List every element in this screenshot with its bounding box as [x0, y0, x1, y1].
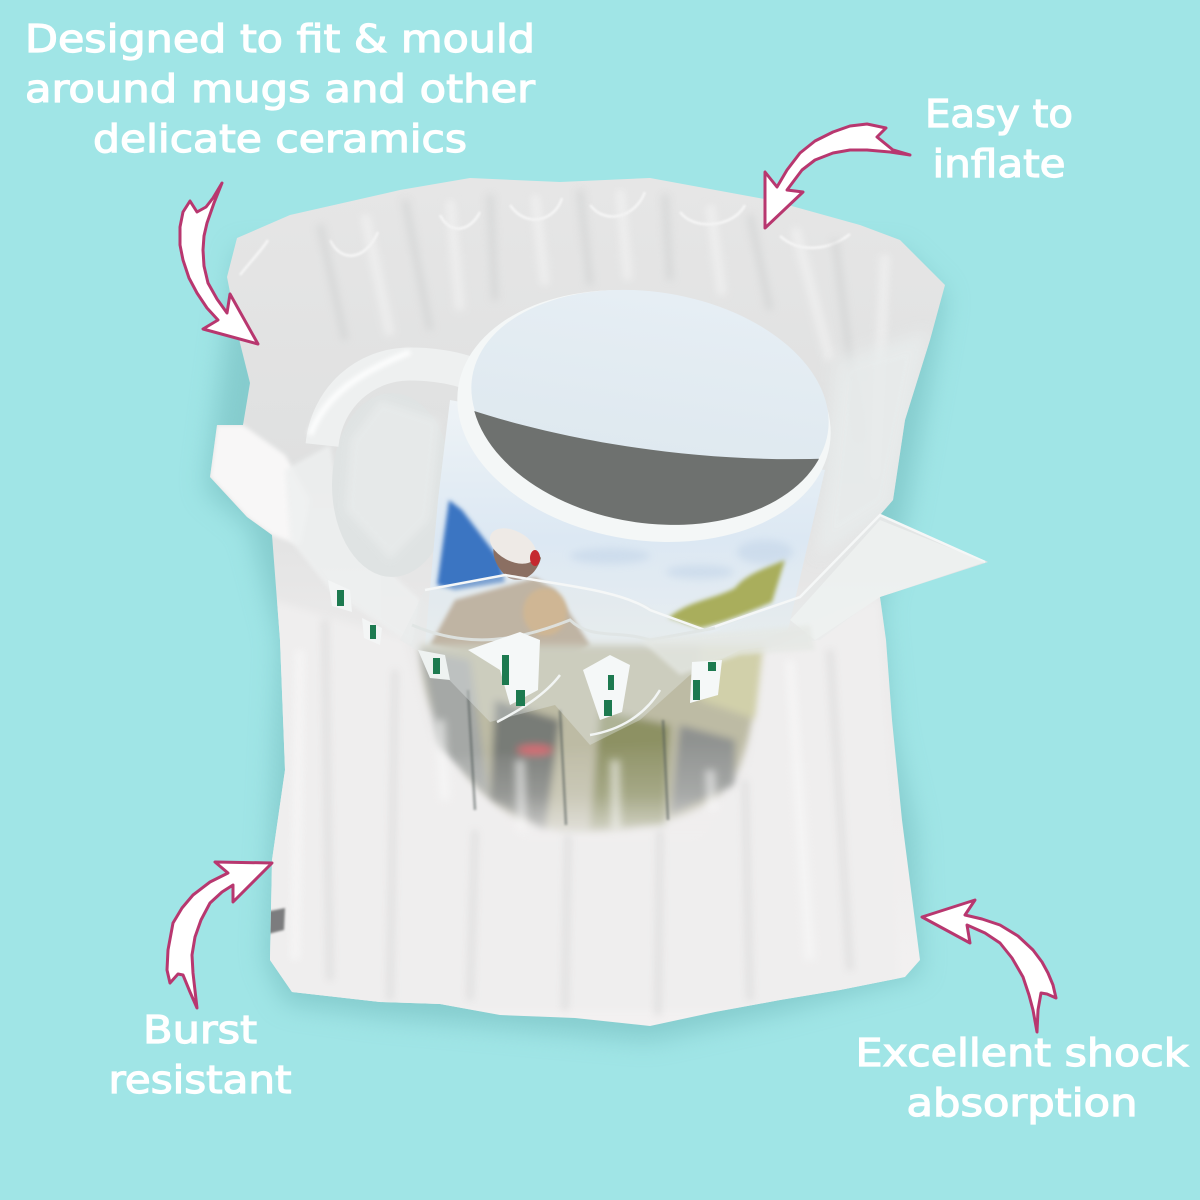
label: shock absorption: absorption	[906, 1081, 1138, 1125]
label: shock absorption: Excellent shock	[856, 1031, 1188, 1075]
lower bag tubes	[265, 597, 900, 1015]
left film fold	[288, 448, 402, 592]
heading: fit and mould	[25, 17, 535, 161]
green and white valve labels	[328, 580, 722, 720]
heading: fit and mould: around mugs and other	[25, 67, 535, 111]
mug rim	[457, 290, 830, 542]
side fill	[265, 597, 900, 1010]
heading: fit and mould: delicate ceramics	[93, 117, 467, 161]
right glossy panel	[828, 347, 928, 528]
label: shock absorption	[856, 1031, 1188, 1125]
arrow: top right	[765, 124, 910, 228]
heading: fit and mould: Designed to fit & mould	[25, 17, 535, 61]
arrow: bottom right	[922, 900, 1056, 1032]
tube seams over mug	[468, 690, 668, 825]
printed wrap	[425, 400, 825, 655]
label: easy to inflate: Easy to	[925, 92, 1073, 136]
handle cell	[332, 393, 452, 577]
bag outline	[210, 178, 988, 1026]
lower mug through bag	[420, 645, 765, 850]
label: burst resistant: Burst	[143, 1008, 257, 1052]
vertical tubes	[319, 195, 843, 330]
bag shadow	[205, 248, 945, 1040]
bag texture upper	[210, 192, 928, 592]
label: burst resistant: resistant	[108, 1058, 292, 1102]
inner shadow	[474, 411, 819, 525]
clear film fold	[400, 515, 985, 745]
helmet	[484, 521, 542, 580]
tube shadows	[325, 620, 850, 1015]
mug handle	[310, 352, 466, 577]
blue panel	[437, 500, 505, 590]
top crinkles	[240, 192, 850, 275]
handle arc	[322, 364, 466, 445]
sky clouds	[570, 540, 793, 579]
arrow: bottom left	[167, 862, 272, 1008]
label: burst resistant	[108, 1008, 292, 1102]
tree	[668, 560, 785, 628]
cyclist body	[430, 578, 590, 665]
label: easy to inflate	[925, 92, 1073, 186]
flap highlight	[790, 520, 985, 640]
air cushion bag with mug	[205, 178, 988, 1040]
bottom left label	[270, 906, 286, 935]
left side white flap	[210, 424, 291, 542]
label: easy to inflate: inflate	[932, 142, 1066, 186]
arrow: top left	[180, 183, 258, 344]
mug body	[425, 400, 825, 665]
